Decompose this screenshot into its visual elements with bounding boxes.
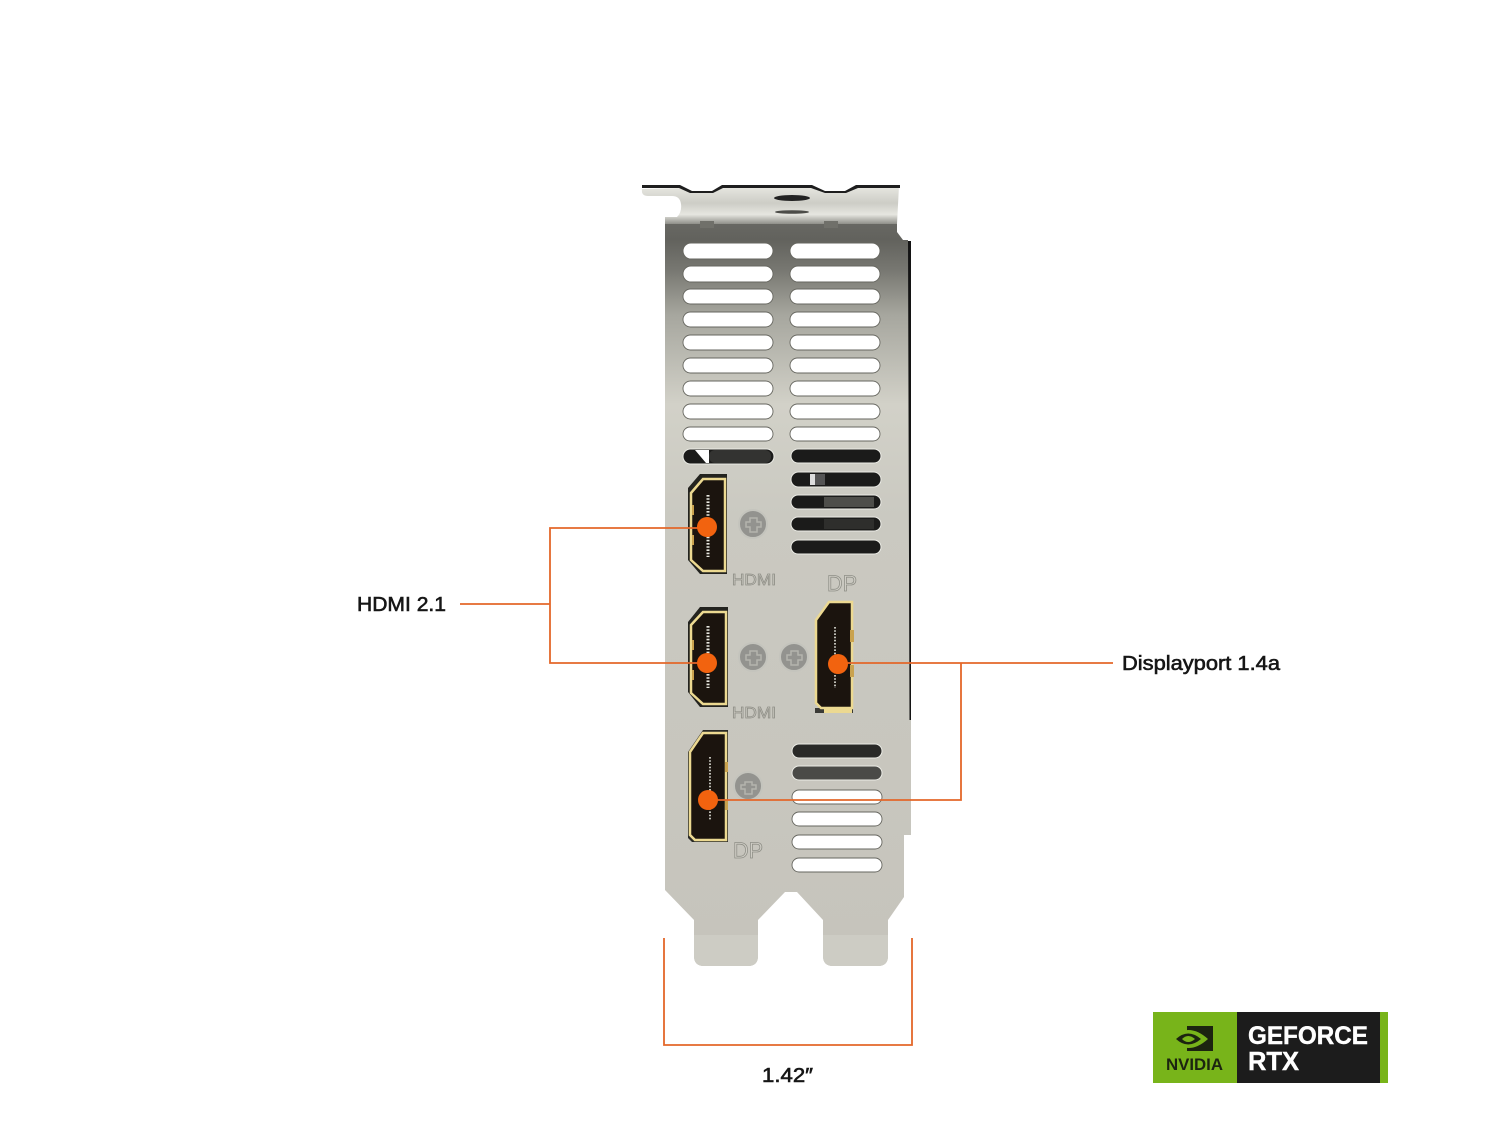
callout: HDMI 2.1	[357, 517, 717, 673]
embossed port labels: HDMI	[732, 572, 776, 589]
callout: Displayport 1.4a: Displayport 1.4a	[1122, 653, 1281, 675]
dimension: 1.42 inch: 1.42″	[762, 1065, 813, 1087]
embossed port labels: DP	[733, 838, 763, 863]
dimension: 1.42 inch	[664, 938, 912, 1087]
callout: Displayport 1.4a	[698, 653, 1281, 810]
bracket: metal plate	[642, 185, 911, 966]
icon: NVIDIA eye	[1170, 1026, 1213, 1051]
logo: NVIDIA GeForce RTX	[1153, 1012, 1388, 1083]
embossed port labels	[732, 571, 857, 863]
callout: HDMI 2.1: HDMI 2.1	[357, 594, 446, 616]
DisplayPort right	[815, 602, 854, 713]
screws	[734, 510, 808, 800]
vent slots: lower right	[792, 744, 882, 872]
HDMI port lower	[688, 607, 728, 707]
logo: NVIDIA GeForce RTX: GEFORCE	[1248, 1022, 1368, 1050]
logo: NVIDIA GeForce RTX: NVIDIA	[1166, 1055, 1223, 1074]
embossed port labels: DP	[827, 571, 857, 596]
embossed port labels: HDMI	[732, 705, 776, 722]
vent slots: right column	[790, 243, 881, 554]
logo: NVIDIA GeForce RTX: RTX	[1248, 1046, 1300, 1076]
tab shading	[694, 935, 888, 966]
plate body	[665, 217, 911, 966]
top flange	[642, 186, 899, 224]
plate dark edge	[906, 241, 911, 720]
flange screw slot	[774, 195, 810, 201]
vent slots: left column	[683, 243, 774, 464]
flange dark top edge	[642, 185, 900, 193]
DisplayPort left	[688, 730, 728, 842]
HDMI port upper	[688, 474, 727, 574]
